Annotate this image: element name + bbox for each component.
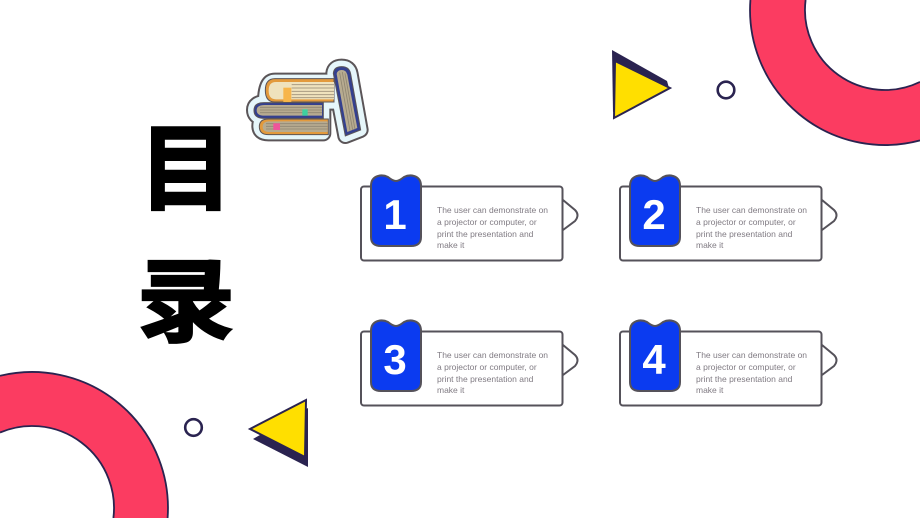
card 1 text: make it [437, 240, 465, 250]
card 4 text: The user can demonstrate on [696, 350, 807, 360]
card 2 text: a projector or computer, or [696, 217, 796, 227]
small circle: bottom [185, 419, 202, 436]
card 3 text: a projector or computer, or [437, 362, 537, 372]
triangle: bottom left [250, 400, 308, 467]
card 3 text: make it [437, 385, 465, 395]
small circle: top [718, 82, 734, 98]
card 2 badge [630, 175, 680, 246]
card 4 [620, 320, 836, 406]
title: 目录: 录 [137, 229, 235, 361]
card 3 tab [563, 345, 578, 375]
card 3 badge [371, 320, 421, 391]
card 4 tab [822, 345, 836, 375]
card 1 box [361, 186, 562, 260]
card 2 tab [822, 200, 836, 230]
title: 目录 [137, 94, 235, 361]
card 2 box [620, 186, 822, 260]
card 1 text: The user can demonstrate on [437, 205, 548, 215]
card 3 text: The user can demonstrate on [437, 350, 548, 360]
card 1 number: 1 [383, 191, 407, 238]
title: 目录: 目 [139, 94, 233, 230]
card 1 badge [371, 175, 421, 246]
card 3 box [361, 332, 562, 406]
card 2 text: print the presentation and [696, 229, 793, 239]
card 4 text: make it [696, 385, 724, 395]
card 3 number: 3 [383, 336, 407, 383]
card 4 badge [630, 320, 680, 391]
ring: top right [750, 0, 920, 145]
card 4 text: a projector or computer, or [696, 362, 796, 372]
icon: stacked books [254, 67, 361, 136]
card 4 number: 4 [642, 336, 666, 383]
card 2 text: The user can demonstrate on [696, 205, 807, 215]
triangle: top right [612, 50, 670, 118]
card 2 text: make it [696, 240, 724, 250]
card 3 text: print the presentation and [437, 374, 534, 384]
card 4 text: print the presentation and [696, 374, 793, 384]
card 1 tab [563, 200, 578, 230]
ring: bottom left [0, 372, 168, 518]
card 1 text: print the presentation and [437, 229, 534, 239]
card 2 number: 2 [642, 191, 666, 238]
card 3 [361, 320, 578, 406]
card 1 text: a projector or computer, or [437, 217, 537, 227]
card 2 [620, 175, 836, 260]
card 1 [361, 175, 578, 260]
card 4 box [620, 332, 822, 406]
